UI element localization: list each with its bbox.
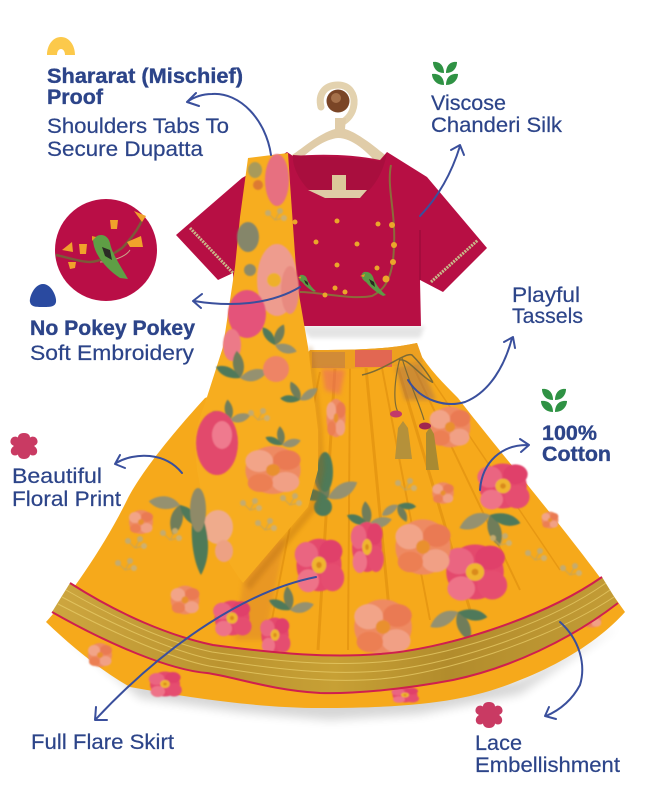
text: viscose chanderi silk: Viscose: [431, 92, 506, 115]
arrow: 100% cotton: [480, 439, 529, 490]
icon: pink flower right: [475, 702, 503, 728]
drawstring and tassels: [362, 355, 439, 470]
blouse shadow on skirt: [300, 326, 425, 338]
outfit shadow: [60, 625, 620, 720]
blouse: [176, 152, 487, 326]
text: shoulder tabs: Shoulders Tabs To: [47, 115, 229, 138]
text: viscose chanderi silk: Chanderi Silk: [431, 114, 563, 137]
heading: Shararat (Mischief) Proof: Shararat (Mischief): [47, 65, 243, 88]
text: playful tassels: Tassels: [512, 305, 583, 328]
skirt pleats: [268, 368, 560, 650]
text: soft embroidery: Soft Embroidery: [30, 342, 195, 365]
dupatta fold shadow: [245, 347, 324, 590]
arrow: shoulder tabs: [187, 93, 271, 155]
arrow: full flare skirt: [95, 577, 316, 720]
inset: embroidery close-up: [55, 199, 157, 301]
icon: green leaves top: [432, 62, 458, 85]
sleeve trims: [190, 228, 233, 273]
text: full flare skirt: Full Flare Skirt: [31, 731, 174, 754]
dupatta top flower: [265, 154, 289, 206]
lace band: [52, 577, 618, 693]
text: beautiful floral print: Floral Print: [12, 488, 121, 511]
arrow: soft embroidery: [193, 287, 300, 308]
text: beautiful floral print: [12, 465, 121, 511]
neck label tag: [332, 175, 346, 190]
heading: Shararat (Mischief) Proof: Proof: [47, 86, 104, 109]
heading: Shararat (Mischief) Proof: [47, 65, 243, 109]
arrow: lace embellishment: [545, 622, 582, 719]
icon: pink flower left: [10, 433, 38, 459]
arrow: playful tassels: [408, 337, 515, 404]
text: viscose chanderi silk: [431, 92, 563, 137]
hanger lower bar: [308, 190, 367, 198]
text: playful tassels: [512, 284, 583, 328]
heading: 100% Cotton: Cotton: [542, 443, 611, 466]
text: lace embellishment: Lace: [475, 732, 522, 755]
heading: 100% Cotton: [542, 422, 611, 466]
text: lace embellishment: [475, 732, 620, 777]
text: beautiful floral print: Beautiful: [12, 465, 102, 488]
hanger: [292, 85, 385, 165]
heading: 100% Cotton: 100%: [542, 422, 597, 445]
icon: blue rounded triangle: [30, 284, 56, 307]
arrow: floral print: [115, 455, 182, 473]
heading: No Pokey Pokey: No Pokey Pokey: [30, 317, 195, 340]
skirt: [46, 343, 625, 708]
icon: green leaves right: [541, 389, 567, 412]
text: playful tassels: Playful: [512, 284, 580, 307]
text: shoulder tabs: [47, 115, 229, 161]
text: lace embellishment: Embellishment: [475, 754, 620, 777]
text: shoulder tabs: Secure Dupatta: [47, 138, 203, 161]
icon: yellow arch: [47, 37, 75, 55]
dupatta: [190, 153, 320, 583]
embroidered birds: [360, 272, 386, 296]
embroidery vine: [300, 165, 394, 297]
arrow: viscose chanderi silk: [420, 145, 464, 216]
